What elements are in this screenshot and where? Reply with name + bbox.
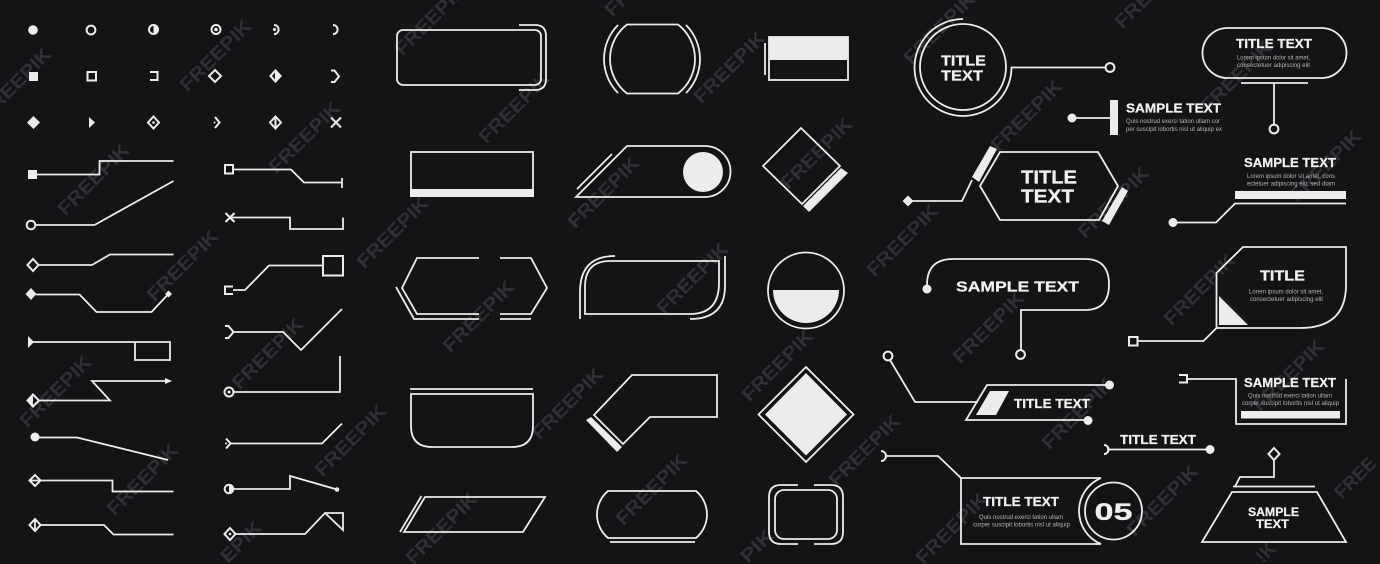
callout: circle title: TEXT	[941, 68, 983, 84]
callout: sample text in bracket frame: Quis nostrud exerci tation ullam	[1248, 394, 1332, 400]
callout: parallelogram title	[884, 352, 1114, 425]
watermark pattern: FREE	[1331, 453, 1380, 504]
watermark pattern: FREEPIK	[228, 314, 308, 394]
frame: bowl	[410, 389, 533, 447]
frame: rounded tab	[580, 256, 725, 319]
callout: sample text over bars	[1168, 155, 1346, 227]
frame: split hexagon	[396, 258, 547, 319]
callout: numbered block 05: Quis nostrud exerci tation ullam	[979, 515, 1063, 521]
callout: hexagon title: TEXT	[1021, 186, 1074, 206]
line r8: diamond flag	[224, 513, 343, 540]
frame: rotated square with bar	[763, 128, 848, 212]
callout: circle title: TITLE	[941, 54, 986, 70]
icon row 1: circles	[28, 25, 338, 35]
line 7: dot slant	[30, 432, 168, 460]
watermark pattern: FREEPIK	[825, 411, 905, 491]
line r3: bracket to square	[225, 256, 343, 294]
callout: trapezoid sample text	[1202, 448, 1346, 542]
watermark pattern: FREEPIK	[1197, 37, 1277, 117]
watermark pattern: FREEPIK	[54, 140, 134, 220]
watermark pattern: FREEPIK	[987, 76, 1067, 156]
line r1: square to tick	[225, 165, 342, 188]
callout: title with corner triangle: TITLE	[1260, 268, 1305, 284]
frames: column 1	[396, 25, 547, 532]
icon row 3: diamonds and marks	[27, 116, 341, 129]
watermark pattern: FREEPIK	[475, 68, 555, 148]
icon row 2: squares and diamonds	[29, 69, 339, 83]
watermark pattern: FREEPIK	[353, 193, 433, 273]
watermark pattern: FREEPIK	[1249, 336, 1329, 416]
callout: trapezoid sample text: TEXT	[1256, 519, 1289, 531]
line r2: cross step	[226, 213, 343, 229]
connector lines: left column	[26, 161, 174, 534]
watermark pattern: FREEPIK	[176, 16, 256, 96]
frame: half filled box	[765, 37, 848, 80]
watermark pattern: FREEPIK	[1038, 374, 1118, 454]
callout: title with corner triangle: consectetuer adipiscing elit	[1250, 297, 1323, 303]
watermark pattern: FREEPIK	[311, 401, 391, 481]
line r4: fork check	[225, 309, 342, 350]
frame: toggle with circle	[576, 146, 731, 197]
watermark pattern: FREEPIK	[690, 28, 770, 108]
line r6: chevron slant	[225, 424, 342, 448]
callout: sample text with bar: Quis nostrud exerci tation ullam cor	[1126, 119, 1220, 125]
watermark pattern: FREEPIK	[439, 277, 519, 357]
callout: sample text pill: SAMPLE TEXT	[956, 278, 1079, 296]
callout: numbered block 05: 05	[1094, 499, 1132, 526]
frame: barrel with side arcs	[604, 24, 700, 94]
watermark pattern: FREEPIK	[1074, 163, 1154, 243]
line r7: half circle step	[225, 476, 339, 494]
watermark pattern: FREEPIK	[265, 98, 345, 178]
frame: half filled circle	[768, 252, 844, 328]
callout: sample text over bars: SAMPLE TEXT	[1244, 155, 1336, 170]
callout: title with corner triangle: Lorem ipsum dolor sit amet,	[1249, 290, 1323, 296]
icon grid	[27, 25, 341, 129]
callout: numbered block 05	[881, 451, 1142, 544]
watermark pattern: FREEPIK	[564, 153, 644, 233]
line 6: zigzag arrow	[28, 378, 172, 406]
callout: sample text pill	[922, 259, 1109, 359]
frame: bar at bottom	[410, 152, 534, 197]
line 4: diamond trough	[26, 288, 172, 312]
callout: trapezoid sample text: SAMPLE	[1248, 507, 1299, 519]
callout: title text on line	[1104, 433, 1214, 454]
frames: column 3	[758, 37, 854, 544]
frame: filled diamond	[758, 367, 854, 462]
callout: sample text in bracket frame	[1179, 375, 1346, 424]
callout: numbered block 05: TITLE TEXT	[983, 495, 1059, 509]
callout: sample text with bar: per suscipit lobortis nisl ut aliquip ex	[1126, 127, 1222, 133]
callout: circle title	[914, 19, 1114, 116]
watermark pattern: FREEPIK	[1123, 461, 1203, 541]
frame: stadium with underline	[597, 491, 707, 542]
callout: pill title: Lorem ipsum dolor sit amet,	[1237, 56, 1310, 62]
line 1: square step	[28, 161, 174, 179]
frame: rounded rectangle with corner arc	[397, 25, 546, 90]
line 3: diamond bend	[28, 254, 174, 271]
callout: pill title: consectetuer adipiscing elit	[1237, 63, 1310, 69]
watermark pattern: FREEPIK	[777, 114, 857, 194]
line 5: triangle and box	[28, 336, 170, 360]
watermark pattern: FREEPIK	[653, 239, 733, 319]
watermark pattern: FREEPIK	[612, 450, 692, 530]
watermark pattern: FREEPIK	[1160, 250, 1240, 330]
callout: pill title: TITLE TEXT	[1236, 37, 1312, 51]
line 2: circle slant	[27, 181, 174, 229]
watermark pattern: FREEPIK	[863, 201, 943, 281]
callout: sample text in bracket frame: SAMPLE TEXT	[1244, 375, 1336, 390]
frames: column 2	[576, 24, 731, 542]
callout: title with corner triangle	[1129, 247, 1346, 346]
callout: hexagon title: TITLE	[1021, 168, 1077, 188]
watermark pattern: FREEPIK	[528, 364, 608, 444]
callout: sample text with bar	[1068, 100, 1222, 135]
line r5: target corner	[224, 356, 340, 396]
callout: title text on line: TITLE TEXT	[1120, 433, 1196, 447]
frame: bent tube	[586, 375, 717, 452]
callout: sample text with bar: SAMPLE TEXT	[1126, 100, 1221, 116]
line 9: diamond bend	[30, 519, 174, 534]
callout: sample text over bars: ectetuer adipiscing elit, sed diam	[1247, 182, 1335, 188]
watermark pattern: FREEPIK	[103, 440, 183, 520]
watermark pattern: FREEPIK	[16, 352, 96, 432]
callout: hexagon title	[902, 146, 1128, 225]
callout: sample text in bracket frame: corper suscipit lobortis nisl ut aliquip	[1242, 401, 1340, 407]
callout: pill title	[1202, 28, 1346, 133]
connector lines: right column	[224, 165, 343, 540]
watermark pattern: FREEPIK	[1286, 126, 1366, 206]
frame: parallelogram	[400, 496, 545, 532]
watermark pattern: FREEPIK	[143, 226, 223, 306]
callout: parallelogram title: TITLE TEXT	[1014, 397, 1090, 411]
frame: double rounded rectangle	[769, 485, 843, 544]
callout: numbered block 05: corper suscipit lobortis nisl ut aliquip	[973, 522, 1071, 528]
watermark pattern: FREEPIK	[738, 326, 818, 406]
watermark pattern: FREEPIK	[949, 288, 1029, 368]
callout: sample text over bars: Lorem ipsum dolor sit amet, cons	[1247, 174, 1335, 180]
line 8: diamond step	[30, 475, 174, 492]
